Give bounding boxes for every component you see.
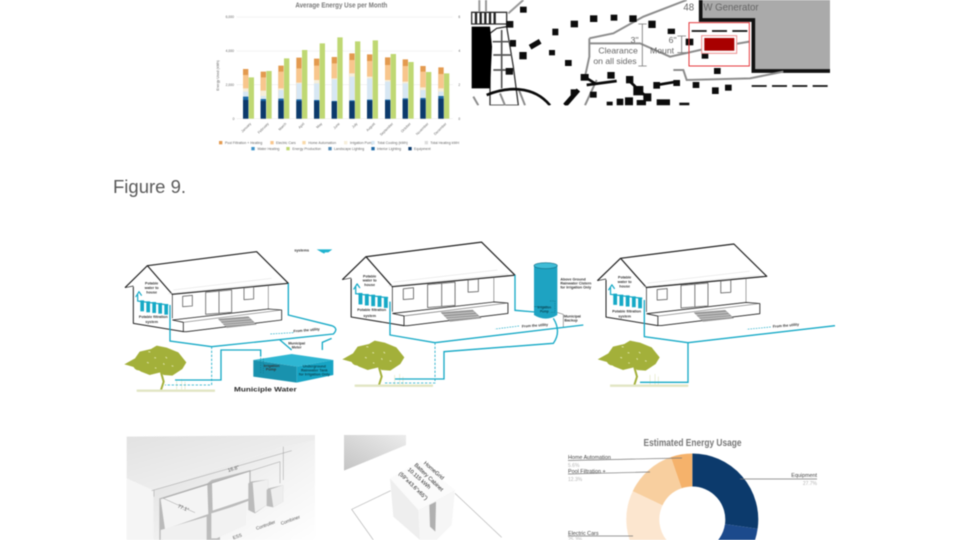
wall surfaces (127, 435, 315, 491)
render: battery cabinet block (344, 435, 502, 540)
generator annotations: Mount (650, 45, 675, 55)
generator annotations: W Generator (703, 2, 759, 13)
gridlines and axis labels: 4,000 (226, 49, 234, 53)
cabinet volume (390, 461, 455, 540)
cabinet label: 10.115 kWh (406, 467, 431, 491)
labels: Underground (303, 365, 326, 369)
heading: Municiple Water: Municiple Water (234, 386, 297, 393)
gridlines and axis labels: 0 (458, 117, 460, 121)
segment labels: Equipment (791, 473, 817, 479)
month labels: April (298, 122, 306, 130)
generator annotations: 6" (669, 35, 677, 45)
donut segments (643, 470, 742, 540)
legend: Total Cooling (kWh) (377, 141, 408, 145)
cabinet label: (59"x43.6"x65") (397, 471, 428, 502)
tree symbols (510, 7, 732, 106)
labels: Potable (618, 276, 631, 280)
segment labels: Home Automation (568, 455, 611, 461)
labels: Backup (564, 319, 578, 323)
month labels (240, 121, 448, 137)
labels: Potable filtration (139, 315, 168, 319)
arrow: from the utility (495, 326, 519, 329)
labels: Irrigation (264, 364, 280, 368)
labels: systems (294, 249, 309, 253)
gridlines and axis labels: 6,000 (226, 15, 234, 19)
labels: Meter (292, 346, 302, 350)
segment labels: Electric Cars (568, 531, 599, 537)
building footprint (701, 0, 830, 71)
labels: Potable filtration (357, 308, 386, 312)
arrow: from the utility (270, 333, 293, 334)
labels: Municipal (288, 342, 305, 346)
month labels: June (333, 122, 341, 130)
house (125, 252, 288, 332)
bar chart: average energy use per month (216, 1, 460, 151)
generator clearance box (689, 23, 749, 66)
tree (124, 346, 215, 391)
diagram: above-ground cistern system (342, 242, 592, 386)
diagram: municipal water system (124, 249, 336, 393)
labels: Pump (266, 367, 277, 371)
month labels: October (400, 121, 412, 133)
labels: for Irrigation Only (299, 373, 331, 377)
labels: Rainwater Tank (301, 369, 329, 373)
month labels: September (379, 121, 395, 137)
labels: system (145, 320, 159, 324)
diagram: municipal supply only (597, 244, 835, 386)
labels: Potable (363, 274, 376, 278)
logo mark (317, 249, 332, 254)
month labels: February (257, 122, 270, 135)
donut chart: estimated energy usage (568, 438, 818, 540)
equipment boxes (159, 470, 283, 540)
dimension labels: Controller (255, 519, 276, 531)
chart title: Estimated Energy Usage (644, 438, 742, 449)
labels: Irrigation (537, 306, 551, 310)
site plan map with generator location (472, 0, 830, 106)
gridlines and axis labels: 6 (458, 15, 460, 19)
gridlines and axis labels: 2 (458, 83, 460, 87)
leader lines (568, 458, 817, 536)
dimension lines (152, 447, 292, 513)
labels: Pump (540, 309, 549, 313)
gridlines and axis labels: 2,000 (226, 83, 234, 87)
generator annotations: 48 (683, 2, 694, 13)
labels (139, 249, 331, 377)
paths and contour lines (473, 0, 783, 105)
generator annotations: 3" (631, 35, 639, 45)
render: wall-mounted equipment with dimensions (127, 435, 315, 540)
diagram: above-ground cistern system: Above Ground (560, 278, 586, 282)
labels: From the utility (773, 322, 800, 329)
dimension labels (178, 465, 300, 540)
house (597, 244, 767, 326)
dimension labels: Combiner (280, 514, 301, 526)
labels (612, 276, 800, 329)
legend: Energy Production (292, 147, 321, 151)
labels: water to (362, 279, 377, 283)
gridlines and axis labels (216, 15, 460, 121)
neighbouring roof (344, 435, 406, 471)
cabinet label: Battery Cabinet (413, 462, 444, 493)
dashed property lines (692, 31, 830, 86)
labels: system (618, 315, 632, 319)
legend: Water Heating (257, 147, 280, 151)
month labels: July (351, 122, 359, 129)
labels: From the utility (522, 323, 549, 329)
labels: Potable (145, 282, 158, 286)
month labels: December (433, 121, 448, 136)
generator annotations (593, 2, 759, 66)
legend: Landscape Lighting (334, 147, 364, 151)
diagram: above-ground cistern system: for Irrigation Only (560, 286, 592, 290)
dimension labels: 16.8" (227, 465, 240, 474)
tree (598, 341, 688, 386)
legend: Equipment (414, 147, 431, 151)
month labels: January (240, 122, 252, 133)
segment labels: Pool Filtration + (568, 469, 606, 475)
gridlines and axis labels: Energy Used (kWh) (216, 60, 220, 91)
labels: house (146, 290, 157, 294)
water pipes (170, 283, 336, 380)
segment percentages: 12.3% (568, 477, 583, 483)
generator annotations: Clearance (598, 45, 638, 55)
arrow: from the utility (747, 327, 771, 329)
dimension brackets (638, 24, 686, 66)
legend: Electric Cars (276, 141, 296, 145)
segment percentages: 27.7% (803, 481, 818, 487)
labels: water to (144, 286, 159, 290)
diagram: above-ground cistern system: Rainwater Cistern (560, 282, 591, 286)
segment percentages: 5.6% (568, 463, 580, 469)
month labels: March (278, 122, 287, 132)
water pipes (640, 300, 835, 382)
generator annotations: on all sides (593, 56, 637, 66)
house (342, 242, 515, 326)
cabinet label: HomeGrid (422, 461, 445, 482)
underground tank (253, 354, 333, 383)
labels: water to (617, 280, 632, 284)
legend: Home Automation (308, 141, 336, 145)
gridlines and axis labels: 0 (233, 117, 235, 121)
labels: Potable filtration (612, 309, 641, 313)
segment labels (568, 455, 817, 537)
dimension labels: 77.1" (177, 504, 190, 514)
month labels: May (316, 122, 323, 129)
water pipes (390, 275, 583, 379)
segment percentages (568, 463, 818, 540)
site outline (352, 491, 502, 540)
labels: From the utility (293, 327, 321, 333)
stacked bars (243, 37, 449, 119)
labels: Municipal (564, 314, 581, 318)
labels: house (619, 284, 630, 288)
chart title: Average Energy Use per Month (295, 1, 388, 10)
month labels: August (366, 122, 376, 132)
cabinet label (397, 461, 445, 502)
caption: Figure 9: Figure 9. (113, 176, 186, 197)
legend: Total Heating kWH (430, 141, 460, 145)
legend: Pool Filtration + Heating (225, 141, 262, 145)
labels (357, 274, 581, 329)
neighbouring structure (472, 0, 523, 105)
tree (342, 341, 433, 386)
rain cistern (534, 263, 557, 319)
labels: system (363, 314, 377, 318)
gridlines and axis labels: 4 (458, 49, 460, 53)
legend: Irrigation Pump (350, 141, 374, 145)
legend: Interior Lighting (377, 147, 401, 151)
labels: house (364, 283, 375, 287)
legend (219, 141, 460, 151)
month labels: November (415, 121, 430, 136)
